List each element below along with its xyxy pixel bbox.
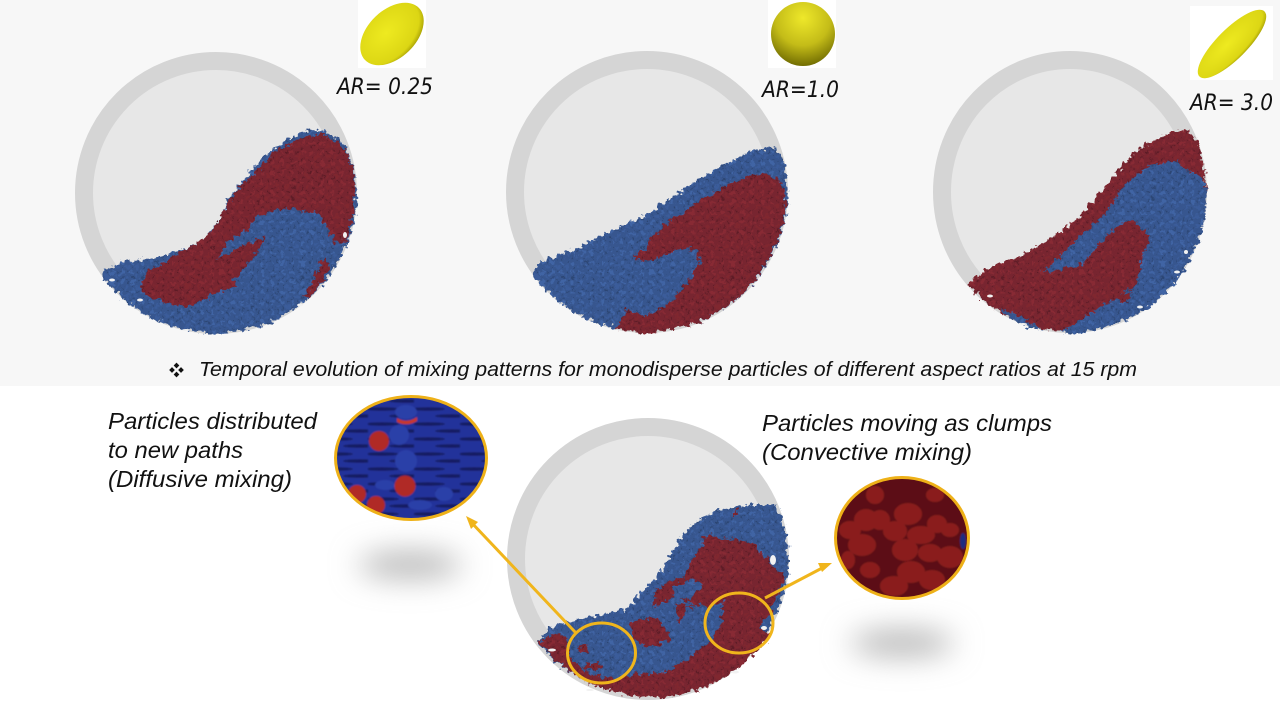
lens: convective mixing close-up bbox=[834, 476, 970, 600]
label: AR 3.0: AR= 3.0 bbox=[1188, 91, 1273, 116]
text: diffusive mixing: Particles distributed bbox=[108, 408, 318, 434]
bed gaps bbox=[109, 232, 347, 331]
icon: oblate particle bbox=[348, 0, 436, 77]
icon: sphere particle bbox=[768, 0, 836, 68]
icon: bullet bbox=[169, 363, 184, 377]
drum shell bbox=[942, 60, 1198, 324]
label: AR 1.0: AR=1.0 bbox=[760, 78, 839, 103]
particle bed bbox=[533, 147, 787, 332]
arrow: to diffusive zoom bbox=[466, 516, 576, 633]
bed gaps bbox=[548, 555, 776, 691]
bed gaps bbox=[987, 250, 1188, 325]
drum shell bbox=[516, 427, 780, 691]
callout: convective region marker bbox=[705, 593, 773, 653]
drum shell bbox=[515, 60, 779, 324]
text: diffusive mixing bbox=[108, 408, 318, 492]
panel: drum AR 3.0 bbox=[942, 60, 1207, 332]
caption: Temporal evolution of mixing patterns for monodisperse particles of different aspect ratios at 15 rpm bbox=[199, 359, 1137, 381]
top background panel bbox=[0, 0, 1280, 386]
text: diffusive mixing: to new paths bbox=[108, 437, 244, 463]
label: AR 0.25: AR= 0.25 bbox=[335, 75, 433, 100]
shadow: convective lens bbox=[850, 630, 954, 656]
text: convective mixing: Particles moving as clumps bbox=[762, 410, 1053, 436]
drum shell bbox=[84, 61, 348, 325]
text: convective mixing bbox=[762, 410, 1053, 465]
panel: mixing drum bbox=[516, 427, 789, 698]
particle bed bbox=[538, 505, 789, 698]
text: convective mixing: (Convective mixing) bbox=[762, 439, 972, 465]
lens: diffusive mixing close-up bbox=[334, 395, 488, 521]
arrow: to convective zoom bbox=[765, 563, 832, 598]
particle bed bbox=[102, 129, 357, 333]
shadow: diffusive lens bbox=[358, 552, 462, 578]
callout: diffusive region marker bbox=[568, 623, 636, 683]
panel: drum AR 1.0 bbox=[515, 60, 787, 332]
panel: drum AR 0.25 bbox=[84, 61, 357, 333]
text: diffusive mixing: (Diffusive mixing) bbox=[108, 466, 292, 492]
icon: prolate particle bbox=[1189, 1, 1275, 87]
particle bed bbox=[968, 130, 1207, 332]
